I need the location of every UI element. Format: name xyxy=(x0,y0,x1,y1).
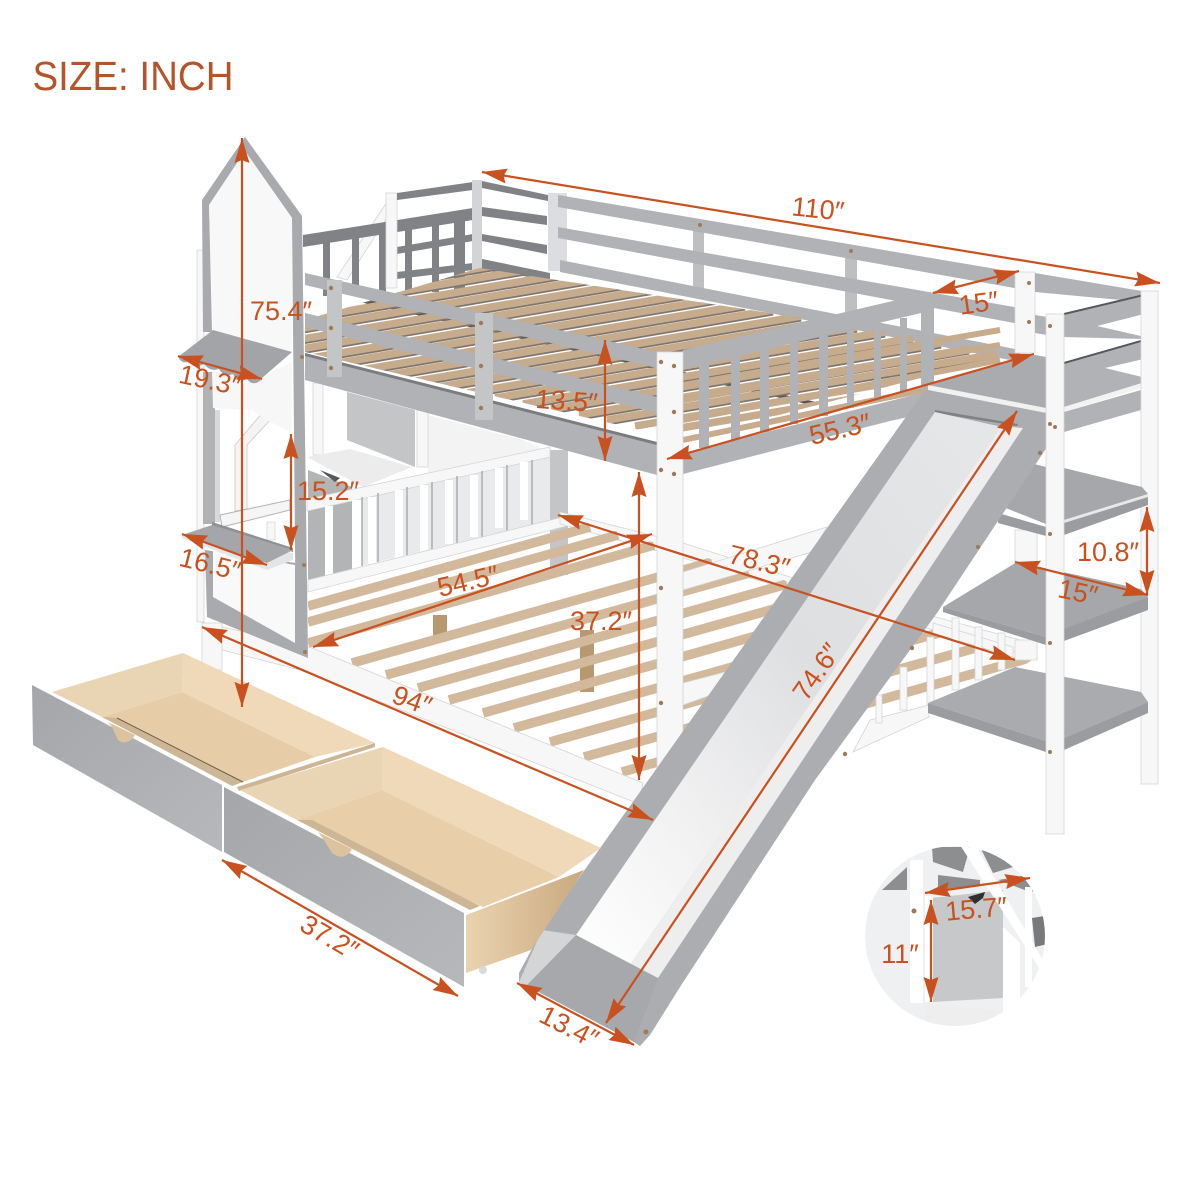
arrow: cubby width xyxy=(925,878,1030,893)
drawer right xyxy=(224,747,601,987)
label 110: 110″ xyxy=(790,191,846,227)
arrow: slide length xyxy=(606,411,1017,1023)
drawer right handle notch xyxy=(318,832,352,857)
corner post xyxy=(657,352,683,800)
shelf one xyxy=(928,355,1046,424)
label 37.2 drawer: 37.2″ xyxy=(295,909,364,966)
shelf two xyxy=(998,463,1148,536)
lower bunk near-side white rail xyxy=(202,622,643,804)
label 13.4: 13.4″ xyxy=(535,1000,604,1055)
label 13.5: 13.5″ xyxy=(535,384,599,418)
back post xyxy=(1015,272,1037,562)
label 15 top: 15″ xyxy=(957,285,1001,321)
label 75.4: 75.4″ xyxy=(250,296,312,326)
label 78.3: 78.3″ xyxy=(725,539,793,583)
lower bunk support beams xyxy=(433,615,594,692)
label 15 right: 15″ xyxy=(1055,573,1101,611)
label 16.5: 16.5″ xyxy=(176,542,244,586)
drawer left xyxy=(32,653,375,852)
arrow: stair step height xyxy=(1146,507,1148,595)
arrow: lower bunk width xyxy=(313,534,652,647)
window frame and inner stair xyxy=(203,372,290,540)
label 55.3: 55.3″ xyxy=(806,408,874,451)
label 10.8: 10.8″ xyxy=(1077,537,1139,567)
arrow: bed length xyxy=(202,627,653,820)
lower bunk slats xyxy=(308,527,1033,772)
label 19.3: 19.3″ xyxy=(176,359,244,401)
arrow: stair step depth xyxy=(1015,562,1148,595)
arrow: overall length xyxy=(482,172,1160,283)
top bunk far end lattice xyxy=(303,180,567,296)
lower bunk back wall and stair cabinet xyxy=(307,383,568,580)
arrow: cubby height xyxy=(930,900,932,1002)
tower under-roof white piece xyxy=(212,362,292,433)
drawer right front xyxy=(224,787,464,987)
slide body xyxy=(519,390,1047,1046)
label 74.6: 74.6″ xyxy=(787,637,847,706)
drawer left handle notch xyxy=(108,722,135,743)
right stair rails xyxy=(1035,273,1148,432)
arrow: drawer length xyxy=(222,860,458,996)
arrow: lower bunk length xyxy=(558,515,1015,660)
tower shelf lower xyxy=(182,522,293,570)
top bunk long back rails xyxy=(558,195,1020,362)
dimension labels xyxy=(176,191,1139,1055)
top bunk right short rail with balusters xyxy=(683,292,1010,474)
arrow: rail height xyxy=(604,340,606,461)
drawer left interior xyxy=(52,653,375,791)
label 37.2 vertical: 37.2″ xyxy=(570,606,632,636)
label 15.7: 15.7″ xyxy=(944,891,1009,927)
rear right post xyxy=(1141,291,1158,784)
white post behind tower xyxy=(197,250,204,622)
tower upper white panel xyxy=(209,151,292,352)
slide bottom apron xyxy=(527,935,658,1042)
right short rail of lower bunk xyxy=(683,527,1037,752)
label 15.2: 15.2″ xyxy=(297,476,359,506)
shelf four xyxy=(928,667,1148,752)
drawer right interior xyxy=(240,747,601,910)
slide top edge xyxy=(935,410,1018,426)
arrow: lower shelf width xyxy=(182,534,267,565)
bunk bed illustration xyxy=(32,137,1158,1046)
tower lower panel xyxy=(205,550,308,658)
arrow: shelf gap xyxy=(290,434,292,550)
top bunk mattress slats xyxy=(305,268,998,432)
slide white surface xyxy=(576,412,1002,965)
rail posts xyxy=(327,280,493,420)
drawer right side xyxy=(466,870,584,973)
slide right rim xyxy=(630,426,1023,978)
label 94: 94″ xyxy=(388,680,436,722)
arrow: total height xyxy=(241,138,243,707)
arrow: clearance height xyxy=(638,472,640,780)
arrow: top guard gap xyxy=(933,271,1019,293)
tower gray frame xyxy=(202,137,308,656)
top bunk near long rails xyxy=(305,273,657,475)
left foot post xyxy=(202,623,222,670)
title: SIZE: INCH xyxy=(32,53,234,99)
inset detail circle xyxy=(865,845,1052,1030)
arrow: roof shelf width xyxy=(178,356,262,379)
label 54.5: 54.5″ xyxy=(434,560,502,603)
shelf three xyxy=(943,562,1148,645)
stair shelves xyxy=(928,272,1158,784)
label 11: 11″ xyxy=(881,939,919,969)
arrow: slide width xyxy=(517,983,634,1045)
dimension arrows xyxy=(178,138,1160,1045)
castle tower xyxy=(178,137,308,658)
slide xyxy=(519,390,1047,1046)
drawer left front xyxy=(32,685,222,852)
lower bunk far rail with balusters xyxy=(307,447,567,592)
arrow: top bunk width xyxy=(667,354,1034,459)
stair front post xyxy=(1046,314,1064,834)
tower roof shelf xyxy=(178,330,292,383)
lower bunk far long rail xyxy=(560,512,1020,654)
